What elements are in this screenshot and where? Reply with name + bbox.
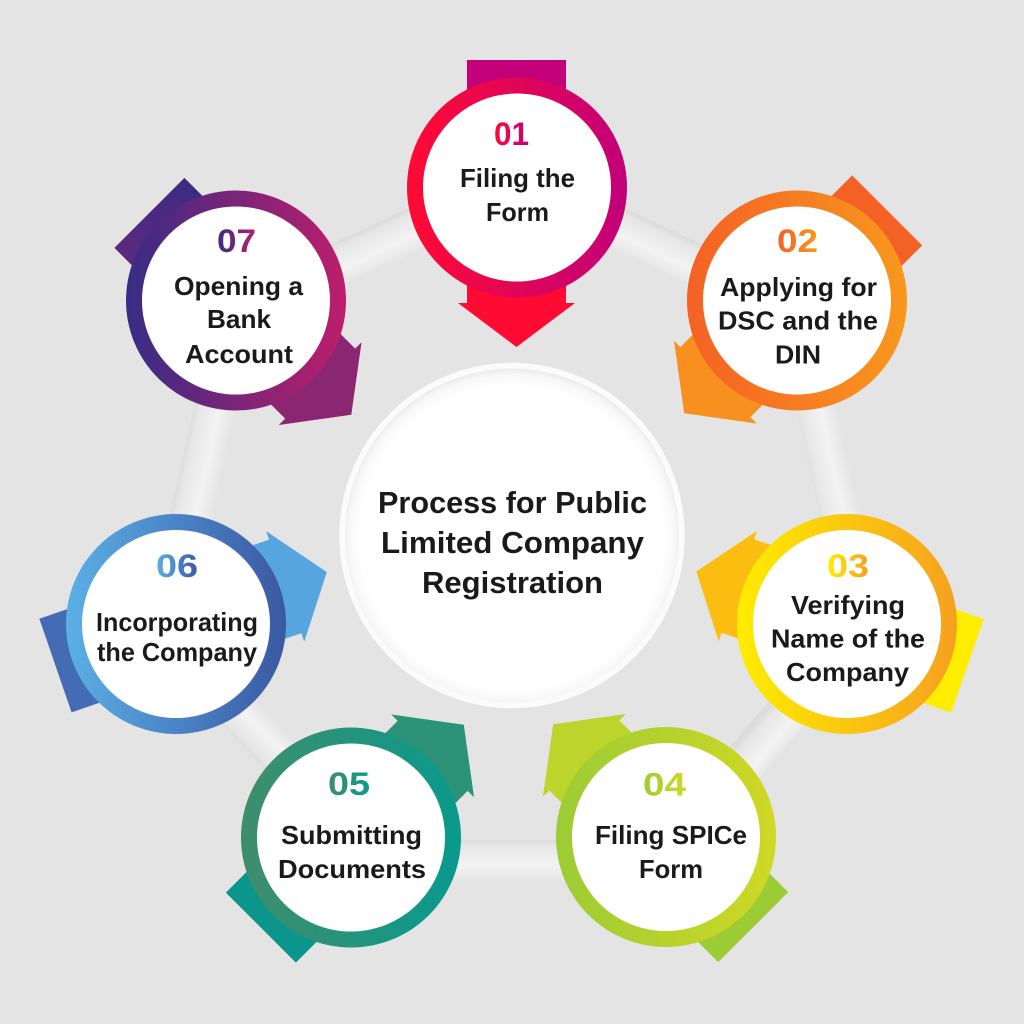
label 07: Opening a	[174, 271, 304, 301]
ring 05	[241, 728, 461, 948]
number 06: 06	[156, 548, 198, 584]
number 05: 05	[328, 766, 370, 802]
label 02: DSC and the	[718, 306, 878, 336]
label 05	[278, 820, 426, 884]
label 06: the Company	[97, 637, 258, 667]
label 01	[460, 163, 575, 227]
ring 06	[66, 514, 286, 734]
ring 07	[126, 190, 346, 410]
ring 02	[687, 190, 907, 410]
center circle	[339, 363, 685, 708]
label 05: Submitting	[281, 820, 422, 850]
label 02: DIN	[775, 340, 821, 370]
center title: Registration	[422, 565, 603, 600]
arrow 02	[643, 169, 929, 455]
arrow 04	[512, 683, 796, 967]
center title: Process for Public	[378, 485, 647, 520]
label 06	[96, 607, 258, 667]
step 03: Verifying Name of the Company	[677, 514, 987, 734]
number 04: 04	[643, 766, 686, 802]
arrow 01	[458, 60, 575, 347]
label 07	[174, 271, 304, 369]
label 01: Form	[486, 197, 549, 227]
label 03: Verifying	[791, 590, 905, 620]
label 02	[718, 272, 878, 370]
label 03	[771, 590, 925, 687]
arrow 06	[36, 517, 346, 721]
label 07: Bank	[207, 304, 272, 334]
label 04	[595, 820, 747, 884]
arrow 03	[677, 516, 987, 721]
label 05: Documents	[278, 854, 426, 884]
number 02: 02	[777, 223, 818, 259]
ring 04	[556, 727, 776, 947]
step 07: Opening a Bank Account	[108, 172, 393, 456]
connecting heptagon bands	[167, 181, 865, 861]
label 03: Company	[786, 657, 910, 687]
number 03: 03	[827, 548, 869, 584]
label 02: Applying for	[720, 272, 877, 302]
number 07: 07	[217, 223, 256, 259]
arrow 07	[108, 172, 393, 456]
label 03: Name of the	[771, 624, 925, 654]
center title	[378, 485, 647, 600]
step 06: Incorporating the Company	[36, 514, 346, 734]
label 07: Account	[185, 339, 293, 369]
label 04: Filing SPICe	[595, 820, 747, 850]
label 06: Incorporating	[96, 607, 258, 637]
step 05: Submitting Documents	[219, 683, 505, 969]
step 04: Filing SPICe Form	[512, 683, 796, 967]
ring 03	[737, 514, 957, 734]
center title: Limited Company	[381, 525, 645, 560]
step 01: Filing the Form	[407, 60, 627, 347]
arrow 05	[219, 683, 505, 969]
number 01: 01	[494, 116, 529, 152]
step 02: Applying for DSC and the DIN	[643, 169, 929, 455]
ring 01	[407, 78, 627, 298]
label 04: Form	[639, 854, 703, 884]
label 01: Filing the	[460, 163, 575, 193]
